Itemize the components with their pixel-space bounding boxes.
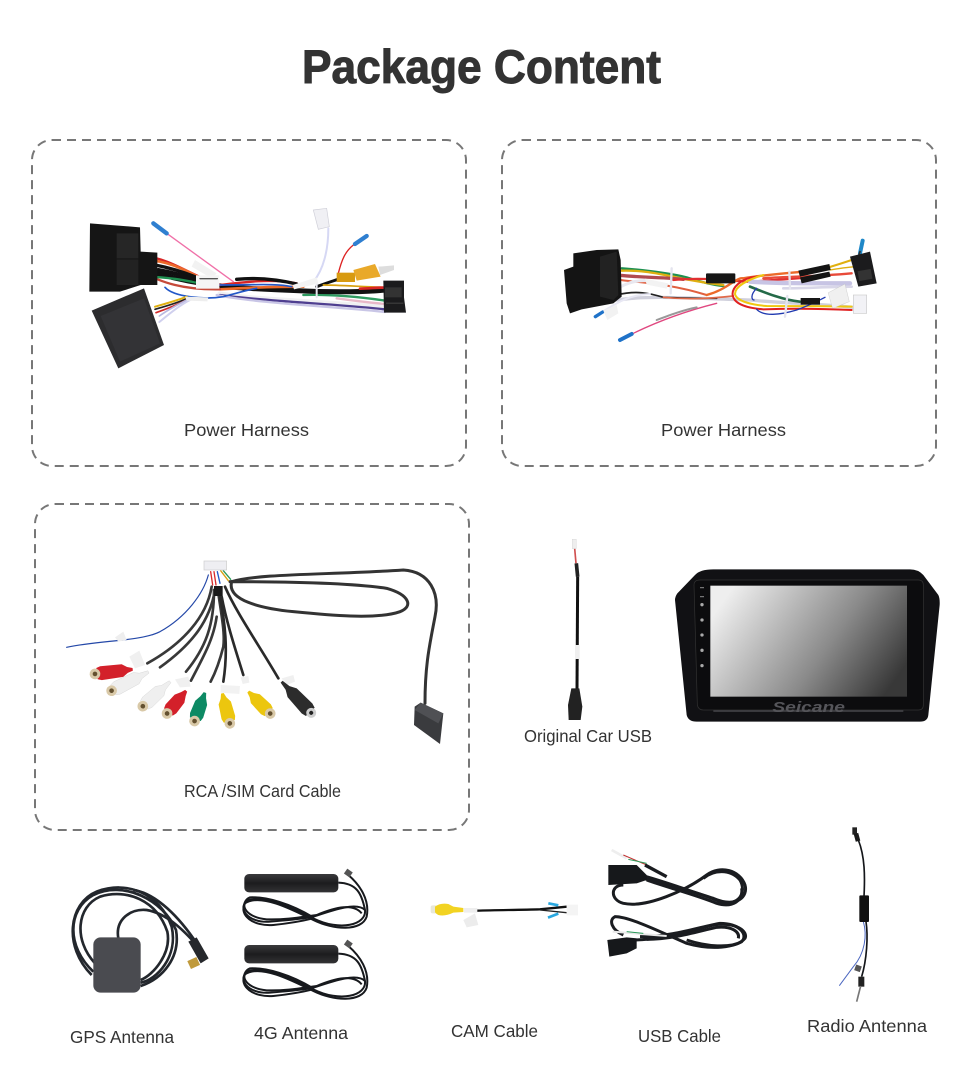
harness photo 2 [564, 241, 877, 340]
item: 4G antenna [243, 869, 367, 1043]
brand logo: Seicane [772, 700, 845, 716]
GPS antenna photo [73, 888, 209, 993]
cable photo [568, 539, 582, 720]
RCA cable photo [67, 561, 443, 744]
item: CAM cable [431, 903, 578, 1041]
4G antenna photos [243, 869, 367, 999]
radio antenna photo [839, 827, 869, 1002]
plug: yellow 2 [243, 687, 279, 722]
antenna 1 [243, 869, 367, 928]
item: radio antenna [807, 827, 927, 1036]
side buttons [700, 587, 704, 667]
plug: red [89, 662, 134, 682]
panel: RCA / SIM card cable [35, 504, 469, 830]
label: power harness 2: Power Harness [661, 420, 786, 440]
label: GPS antenna: GPS Antenna [70, 1027, 174, 1047]
panel: power harness 1 [32, 140, 466, 466]
plug: black audio jack [276, 677, 320, 722]
label: original car USB: Original Car USB [524, 726, 652, 746]
plug: white 2 [134, 676, 175, 715]
label: USB cable: USB Cable [638, 1026, 721, 1046]
head unit [675, 569, 940, 722]
label: CAM cable: CAM Cable [451, 1021, 538, 1041]
cable 1 [608, 850, 746, 905]
item: original car USB [524, 539, 652, 746]
title: Package Content [302, 40, 661, 93]
reflection [713, 710, 903, 712]
label: power harness 1: Power Harness [184, 420, 309, 440]
label: radio antenna: Radio Antenna [807, 1016, 927, 1036]
label: RCA / SIM card cable: RCA /SIM Card Cable [184, 781, 341, 801]
harness photo 1 [89, 208, 406, 368]
screen [710, 586, 907, 697]
plug: yellow [216, 692, 238, 730]
CAM cable photo [431, 903, 578, 927]
plug: red 2 [158, 686, 192, 722]
item: GPS antenna [70, 888, 209, 1047]
item: USB cable [607, 850, 746, 1046]
label: 4G antenna: 4G Antenna [254, 1023, 348, 1043]
plug: green [186, 690, 212, 728]
cable 2 [607, 917, 746, 957]
antenna 2 [243, 940, 367, 999]
USB cable photos [607, 850, 746, 957]
panel: power harness 2 [502, 140, 936, 466]
plug: white [104, 666, 152, 699]
